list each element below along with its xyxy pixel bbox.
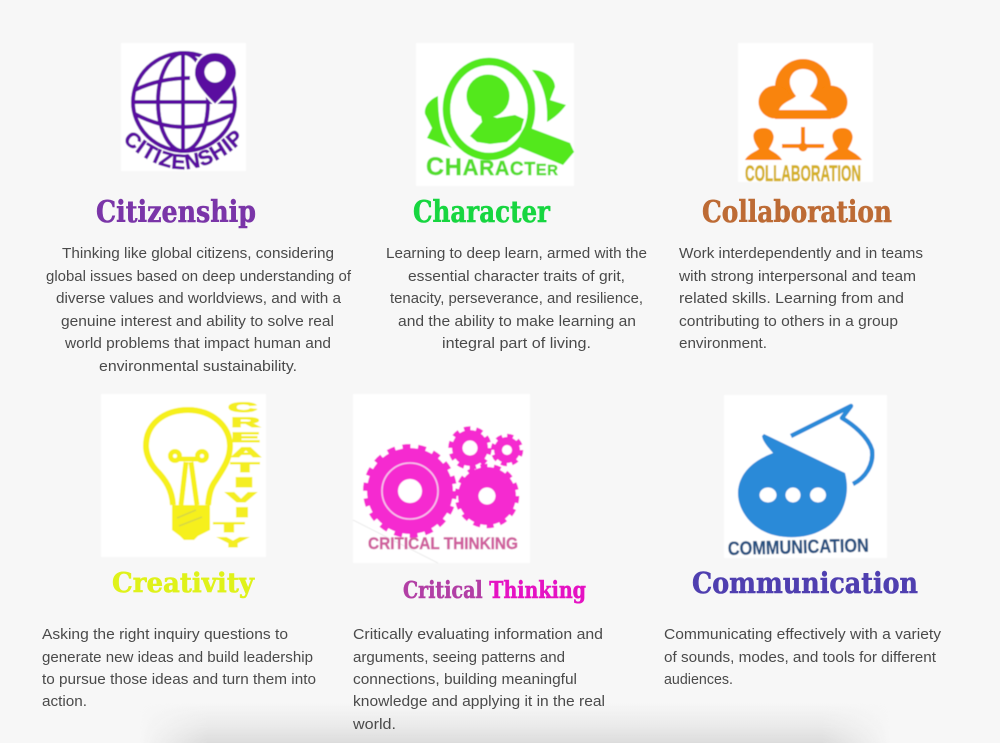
text: character description: Learning to deep learn, armed with the: [386, 245, 647, 262]
panel: critical thinking: [352, 394, 605, 733]
icon: creativity light bulb: C: [228, 399, 257, 415]
text: collaboration description: environment.: [679, 335, 767, 352]
text: collaboration description: contributing to others in a group: [679, 313, 898, 330]
panel: communication: [664, 395, 942, 688]
icon: creativity light bulb: T: [231, 459, 260, 475]
icon: collaboration cloud and people: [738, 43, 873, 186]
icon: communication speech bubbles: COMMUNICATION: [728, 536, 869, 560]
text: critical thinking description: world.: [352, 716, 396, 733]
text: character description: [386, 245, 647, 352]
text: citizenship description: world problems that impact human and: [64, 335, 331, 352]
text: citizenship description: genuine interest and ability to solve real: [61, 313, 334, 330]
text: collaboration description: [678, 245, 923, 352]
text: critical thinking description: arguments, seeing patterns and: [353, 649, 565, 666]
text: critical thinking description: Critically evaluating information and: [353, 626, 603, 643]
text: citizenship description: Thinking like global citizens, considering: [62, 245, 334, 262]
text: communication description: [664, 626, 942, 688]
icon: citizenship globe and pin: CITIZENSHIP: [124, 130, 240, 170]
bottom shadow: [161, 718, 870, 743]
text: citizenship description: global issues based on deep understanding of: [46, 268, 352, 285]
text: communication description: audiences.: [664, 671, 733, 688]
text: collaboration description: related skills. Learning from and: [679, 290, 904, 307]
text: character description: tenacity, perseverance, and resilience,: [390, 290, 643, 307]
heading: Collaboration: Collaboration: [702, 195, 892, 230]
icon: character magnifier: [416, 43, 574, 186]
icon: creativity light bulb: V: [226, 489, 258, 505]
text: character description: integral part of living.: [442, 335, 591, 352]
icon: creativity light bulb: T: [214, 519, 246, 535]
text: creativity description: Asking the right inquiry questions to: [42, 626, 288, 643]
text: creativity description: generate new ideas and build leadership: [42, 649, 313, 666]
text: citizenship description: environmental sustainability.: [99, 358, 297, 375]
text: communication description: Communicating effectively with a variety: [664, 626, 942, 643]
icon: creativity light bulb: A: [231, 444, 261, 460]
icon: creativity light bulb: Y: [218, 534, 250, 550]
icon: character magnifier: CHARACTER: [426, 153, 559, 181]
heading: Creativity: Creativity: [112, 568, 255, 599]
icon: communication speech bubbles: [724, 395, 887, 560]
heading: Critical Thinking: Critical Thinking: [403, 577, 586, 604]
text: critical thinking description: connections, building meaningful: [353, 671, 577, 688]
text: citizenship description: diverse values and worldviews, and with a: [56, 290, 342, 307]
icon: creativity light bulb: E: [231, 429, 260, 445]
text: collaboration description: Work interdependently and in teams: [679, 245, 923, 262]
icon: creativity light bulb: R: [231, 414, 260, 430]
icon: citizenship globe and pin: [124, 50, 240, 170]
icon: collaboration cloud and people: COLLABORATION: [745, 161, 861, 186]
icon: critical thinking gears: [353, 394, 530, 563]
panel: citizenship: [46, 50, 352, 375]
text: character description: essential character traits of grit,: [408, 268, 625, 285]
heading: Communication: Communication: [692, 566, 918, 600]
heading: Citizenship: Citizenship: [96, 195, 256, 230]
text: citizenship description: [46, 245, 352, 375]
text: character description: and the ability to make learning an: [398, 313, 636, 330]
icon: creativity light bulb: I: [233, 474, 255, 490]
text: communication description: of sounds, modes, and tools for different: [664, 649, 937, 666]
icon: critical thinking gears: CRITICAL THINKING: [368, 535, 518, 553]
text: collaboration description: with strong interpersonal and team: [678, 268, 916, 285]
text: creativity description: action.: [42, 693, 87, 710]
icon: creativity light bulb: [101, 394, 266, 557]
text: critical thinking description: knowledge and applying it in the real: [353, 693, 605, 710]
text: critical thinking description: [352, 626, 605, 733]
icon: creativity light bulb: I: [234, 504, 250, 520]
panel: creativity: [42, 394, 316, 710]
text: creativity description: to pursue those ideas and turn them into: [42, 671, 316, 688]
panel: character: [386, 43, 647, 352]
heading: Character: Character: [413, 195, 551, 230]
panel: collaboration: [678, 43, 923, 352]
text: creativity description: [42, 626, 316, 710]
